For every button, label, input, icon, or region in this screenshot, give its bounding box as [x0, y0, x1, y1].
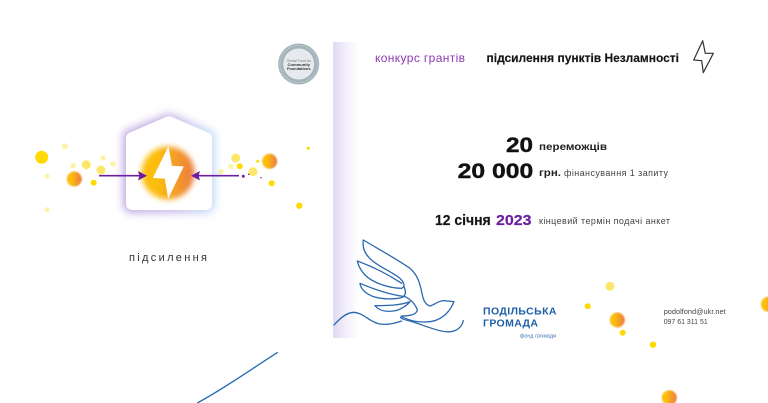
- stat: deadline: [435, 212, 670, 229]
- arrow: left into circle: [99, 171, 147, 180]
- right dots cluster: [218, 147, 310, 209]
- icon: house with energy bolt: [126, 116, 212, 210]
- stat: funding: [458, 160, 668, 183]
- contact details: podolfond@ukr.net: [664, 307, 727, 316]
- heading: program title: підсилення пунктів Незламності: [486, 51, 679, 65]
- stat: funding: фінансування 1 запиту: [564, 168, 668, 178]
- logo: Podilska Hromada: ПОДІЛЬСЬКА: [483, 306, 557, 318]
- logo: Podilska Hromada: [483, 306, 557, 340]
- icon: outline lightning bolt: [694, 41, 713, 73]
- icon: line-art dove: [334, 240, 463, 332]
- logo: Podilska Hromada: фонд громади: [520, 334, 556, 340]
- decorative curve: bottom blue line: [197, 352, 278, 403]
- logo: community foundations seal: Global Fund for: [286, 59, 312, 63]
- bottom right dots: [585, 282, 768, 403]
- panel: lavender divider band: [333, 42, 359, 338]
- stat: winners: [506, 134, 608, 157]
- caption: boost: підсилення: [129, 252, 207, 264]
- contact details: 097 61 311 51: [664, 317, 708, 326]
- left dots cluster: [35, 143, 116, 212]
- logo: Podilska Hromada: ГРОМАДА: [483, 318, 538, 330]
- logo: community foundations seal: Foundations: [287, 67, 310, 71]
- stat: funding: 20 000: [458, 160, 533, 183]
- heading: grant competition: конкурс грантів: [375, 51, 465, 65]
- stat: deadline: кінцевий термін подачі анкет: [539, 216, 670, 226]
- stat: winners: 20: [506, 134, 533, 157]
- stat: funding: грн.: [539, 167, 561, 179]
- logo: community foundations seal: Community: [288, 63, 310, 67]
- logo: community foundations seal: [278, 44, 319, 84]
- stat: deadline: 12 січня: [435, 212, 491, 229]
- stat: deadline: 2023: [496, 212, 532, 229]
- arrow: right into circle: [191, 171, 239, 180]
- stat: winners: переможців: [539, 141, 608, 153]
- contact details: [664, 307, 727, 326]
